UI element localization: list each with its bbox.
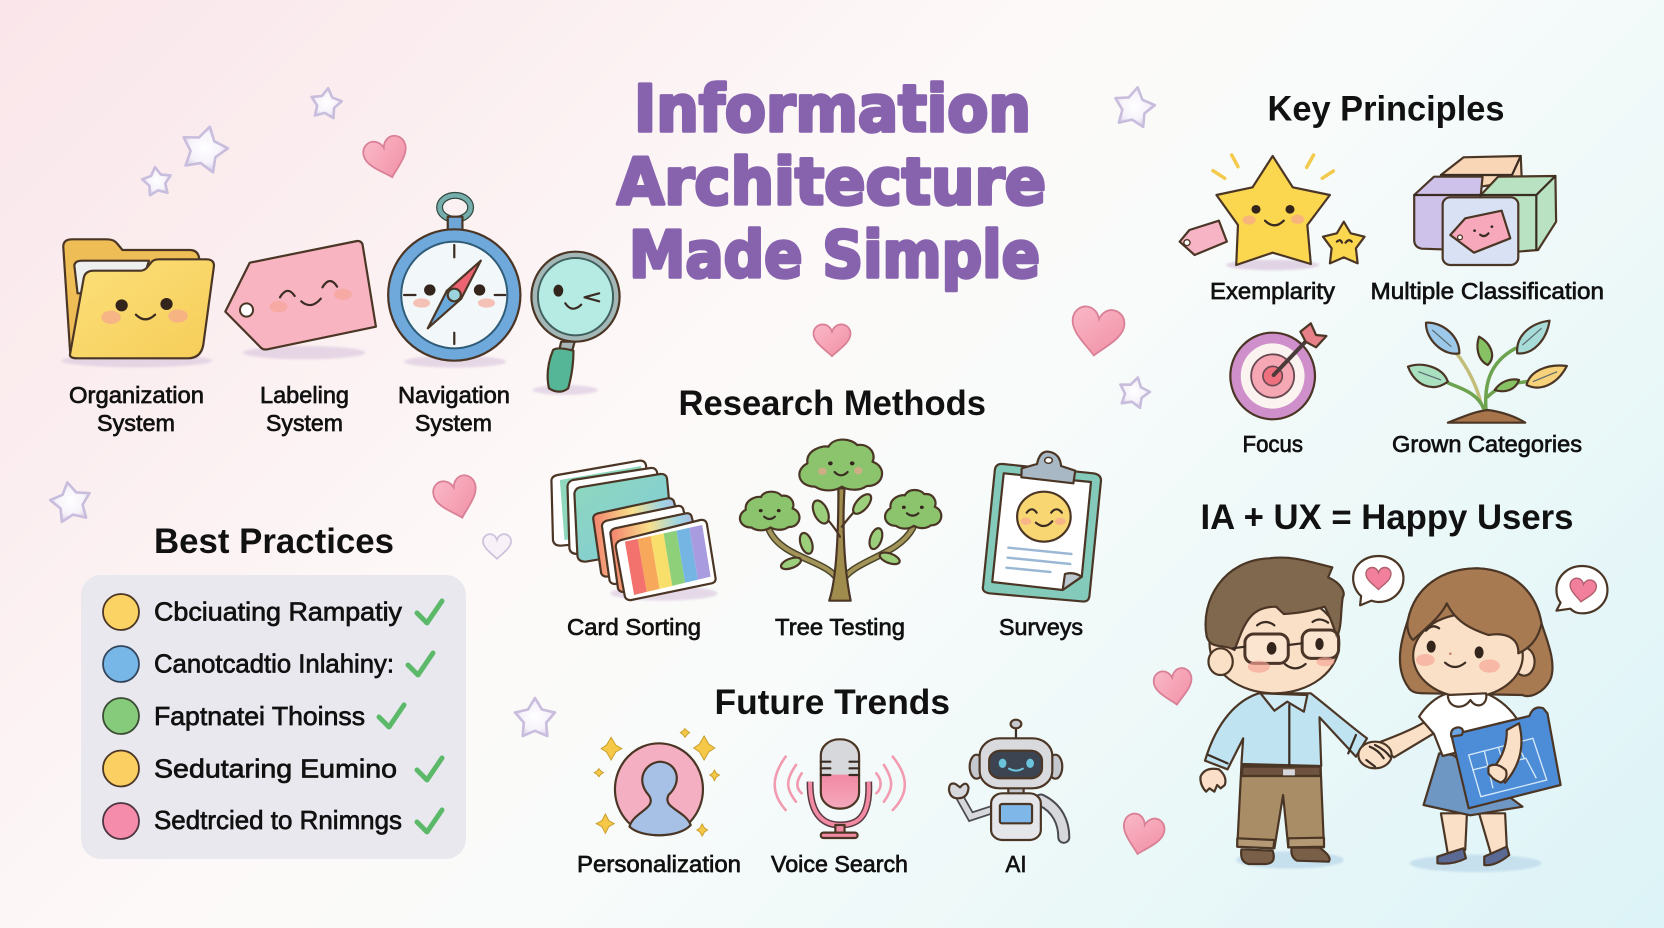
list row 1: [103, 594, 442, 630]
label: Voice Search: Voice Search: [771, 851, 908, 877]
icon: magnifier: [531, 252, 620, 395]
label: Card Sorting: Card Sorting: [567, 614, 701, 640]
panel: happy users: [1200, 498, 1607, 872]
icon: growing plant: [1408, 321, 1567, 423]
icon: card sorting: [551, 461, 717, 601]
heart: [1118, 811, 1167, 859]
heart outline: [483, 534, 511, 559]
icon: label tag: [225, 241, 376, 359]
star: [1116, 374, 1153, 409]
label: Navigation System: Navigation: [398, 382, 510, 408]
list row 3: [103, 698, 404, 734]
heading: Future Trends: Future Trends: [714, 683, 950, 722]
title: [617, 73, 1046, 293]
list row 4: Sedutaring Eumino: [154, 754, 397, 784]
list background: [81, 575, 466, 859]
icon: speech bubble with heart: [1556, 566, 1607, 613]
label: Navigation System: System: [415, 410, 492, 436]
title: Made Simple: [629, 219, 1040, 293]
label: Exemplarity: Exemplarity: [1210, 278, 1335, 304]
star: [177, 121, 232, 174]
list row 5: Sedtrcied to Rnimngs: [154, 805, 402, 835]
list row 2: Canotcadtio Inlahiny:: [154, 648, 394, 678]
heading: Research Methods: Research Methods: [678, 384, 986, 423]
panel: key principles: [1180, 90, 1604, 457]
icon: compass: [388, 195, 520, 368]
label: AI: AI: [1006, 851, 1026, 877]
illustration: girl with blueprint: [1377, 568, 1561, 872]
label: Tree Testing: Tree Testing: [775, 614, 905, 640]
icon: folder: [61, 239, 214, 367]
icon: star exemplarity: [1180, 155, 1365, 270]
heart: [361, 133, 413, 183]
list row 5: [103, 803, 442, 839]
icon: clipboard survey: [983, 452, 1101, 602]
star: [1111, 84, 1157, 128]
heading: Best Practices: Best Practices: [154, 522, 394, 561]
icon: target: [1230, 323, 1326, 419]
heart: [1068, 305, 1126, 359]
decorative stars: [48, 84, 1157, 736]
star: [515, 698, 555, 736]
star: [309, 86, 343, 119]
label: Grown Categories: Grown Categories: [1392, 431, 1582, 457]
illustration: clasped hands: [1358, 742, 1392, 768]
panel: research methods: [551, 384, 1101, 640]
icon: personalization: [594, 729, 719, 836]
heading: Key Principles: Key Principles: [1268, 90, 1504, 128]
panel: IA systems: [61, 195, 620, 436]
icon: tree: [740, 440, 941, 601]
label: Personalization: Personalization: [577, 851, 741, 877]
list row 4: [103, 750, 442, 786]
decorative hearts: [361, 133, 1196, 859]
list row 2: [103, 646, 433, 682]
label: Multiple Classification: Multiple Classification: [1370, 278, 1604, 304]
list row 1: Cbciuating Rampatiy: [154, 596, 402, 626]
title: Architecture: [617, 146, 1046, 220]
star: [141, 165, 173, 196]
heart: [1152, 667, 1196, 708]
list row 3: Faptnatei Thoinss: [154, 701, 365, 731]
label: Organization System: Organization: [69, 382, 204, 408]
icon: multiple classification boxes: [1414, 156, 1556, 265]
icon: speech bubble with heart: [1353, 556, 1403, 605]
label: Focus: Focus: [1242, 431, 1303, 457]
heading: IA + UX = Happy Users: IA + UX = Happy Users: [1200, 498, 1574, 537]
panel: future trends: [577, 683, 1064, 877]
label: Navigation System: [398, 382, 510, 436]
label: Labeling System: Labeling: [260, 382, 349, 408]
title: Information: [634, 73, 1031, 147]
label: Labeling System: [260, 382, 349, 436]
heart: [431, 473, 483, 523]
panel: best practices: [81, 522, 466, 859]
heart: [814, 324, 850, 356]
label: Labeling System: System: [266, 410, 343, 436]
icon: robot: [949, 720, 1064, 840]
star: [48, 479, 94, 523]
icon: microphone: [775, 739, 905, 838]
label: Organization System: System: [97, 410, 175, 436]
label: Organization System: [69, 382, 204, 436]
illustration: boy: [1200, 558, 1367, 869]
label: Surveys: Surveys: [999, 614, 1083, 640]
